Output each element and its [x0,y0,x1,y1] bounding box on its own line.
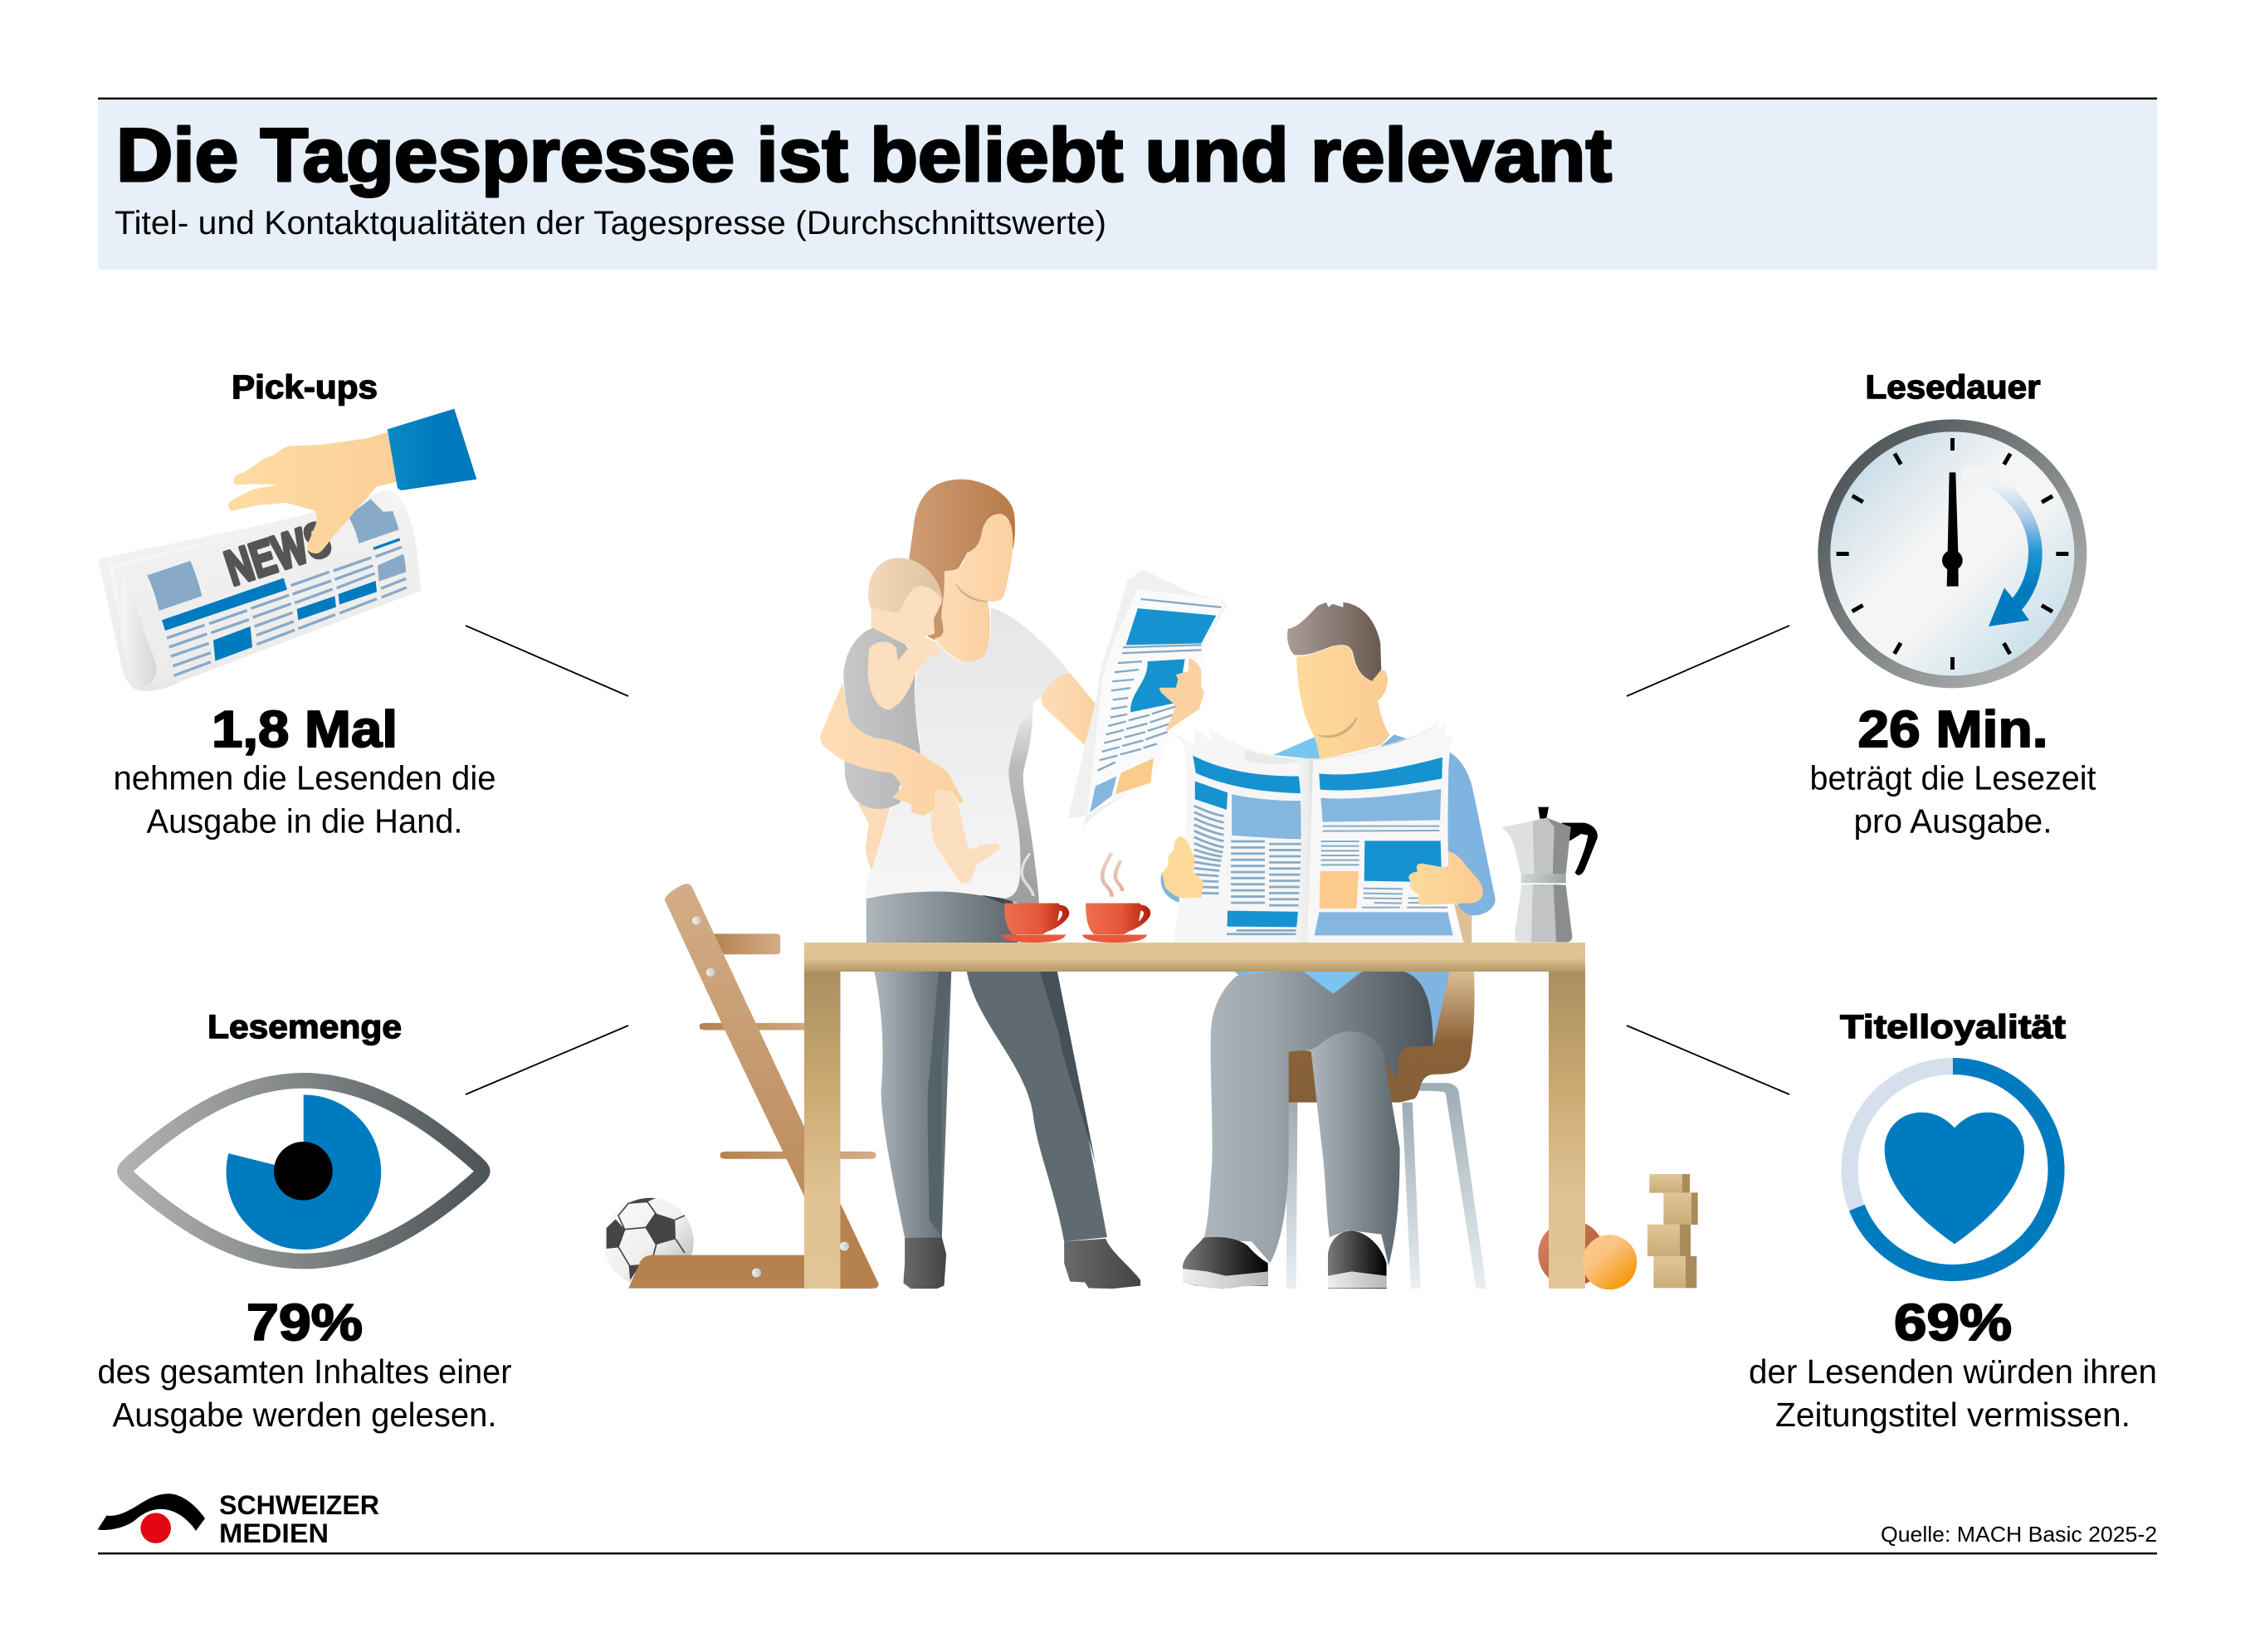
table [804,943,1585,1289]
woman's newspaper [1068,569,1228,827]
red ball [1538,1221,1604,1287]
panel: Titelloyalität [1749,1009,2157,1434]
description: Lesedauer: pro Ausgabe. [1854,802,2052,840]
woman torso, baby and newspaper [820,480,1228,909]
description: Lesedauer: beträgt die Lesezeit [1809,758,2096,797]
steam [1102,853,1122,897]
description: Lesemenge: des gesamten Inhaltes einer [98,1352,511,1391]
icon: hand grabbing newspaper: NEWS [218,510,337,596]
illustration: family reading at table [604,480,1698,1289]
right page [1245,719,1483,943]
description: Titelloyalität: der Lesenden würden ihren [1749,1352,2157,1391]
coffee cups [1001,853,1150,943]
value: 79%: 79% [246,1294,363,1352]
heading: Lesedauer: Lesedauer [1866,369,2040,406]
value: 26 Min.: 26 Min. [1857,701,2048,758]
icon: hand grabbing newspaper [98,409,476,691]
description: Lesedauer [1809,758,2096,840]
description: Pick-ups: Ausgabe in die Hand. [146,802,463,840]
value: 1,8 Mal: 1,8 Mal [212,701,398,758]
description: Pick-ups [113,758,496,840]
heading: Lesemenge: Lesemenge [207,1009,402,1045]
wooden blocks [1647,1174,1698,1288]
description: Lesemenge [98,1352,511,1434]
value: 69%: 69% [1894,1294,2012,1352]
description: Lesemenge: Ausgabe werden gelesen. [113,1396,496,1434]
description: Pick-ups: nehmen die Lesenden die [113,758,496,797]
logo: Schweizer Medien: SCHWEIZER [219,1490,379,1520]
orange ball [1582,1235,1637,1289]
panel: Lesemenge [98,1009,511,1434]
man's newspaper [1161,719,1483,943]
football [604,1197,694,1287]
icon: clock with arrow [1818,419,2087,688]
woman legs [866,891,1140,1289]
man's right arm and chair back [1446,753,1496,943]
description: Titelloyalität [1749,1352,2157,1434]
heading: Titelloyalität: Titelloyalität [1840,1009,2066,1045]
connector lines [466,626,1789,1094]
man's chair, legs and arm [1183,968,1486,1289]
footer [98,1490,2157,1555]
moka pot [1501,807,1598,943]
description: Titelloyalität: Zeitungstitel vermissen. [1775,1396,2131,1434]
woman [820,480,1228,1289]
cup right [1082,904,1150,943]
subtitle: Titel- und Kontaktqualitäten der Tagespresse (Durchschnittswerte) [115,205,1106,241]
source: Quelle: MACH Basic 2025-2 [1881,1522,2157,1547]
logo: Schweizer Medien: MEDIEN [219,1518,329,1548]
logo: Schweizer Medien [98,1490,379,1548]
high chair [628,884,879,1289]
left page [1161,727,1306,943]
title: Die Tagespresse ist beliebt und relevant [116,114,1612,197]
header [98,98,2157,270]
icon: eye with pie iris [124,1080,482,1261]
heading: Pick-ups: Pick-ups [232,369,378,406]
icon: heart in progress ring [1849,1066,2057,1273]
panel: Pick-ups [98,369,495,840]
panel: Lesedauer [1809,369,2096,840]
man upper body [1273,602,1411,760]
cup left [1001,904,1069,943]
